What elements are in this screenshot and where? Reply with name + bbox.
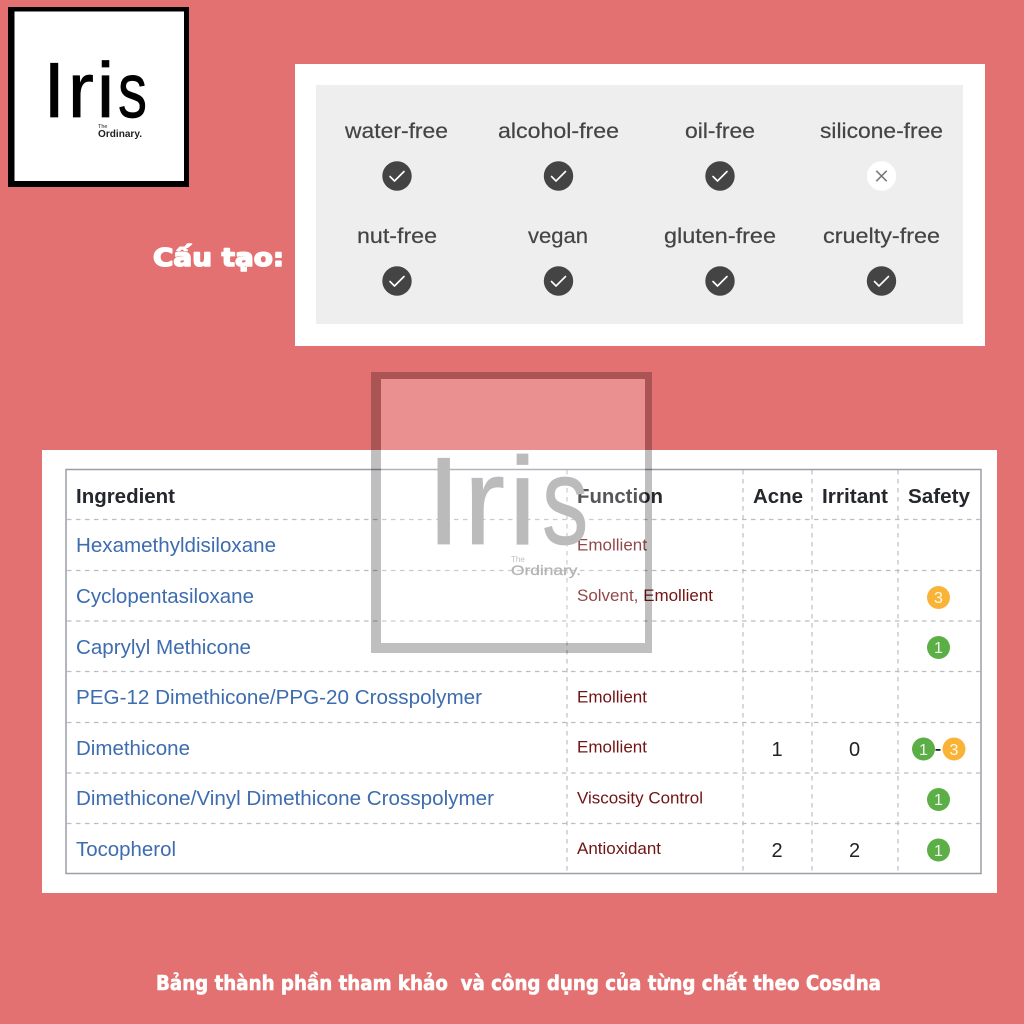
watermark: Iris The Ordinary (371, 372, 652, 653)
attribute labels: nut-free (357, 225, 437, 248)
ingredient functions: Antioxidant (577, 840, 661, 858)
table header (76, 486, 971, 508)
safety badges: 1 (934, 792, 943, 809)
heading: Cấu tạo: Cấu tạo: (153, 243, 284, 272)
acne and irritant scores: 1 (771, 739, 783, 761)
watermark: Iris The Ordinary: r (464, 433, 505, 571)
safety badges (912, 586, 966, 862)
ingredient functions (577, 536, 713, 858)
ingredient functions: Emollient (577, 738, 647, 756)
table header: Acne (753, 486, 803, 508)
ingredient names: Dimethicone (76, 737, 190, 760)
logo: Iris The Ordinary: The (98, 124, 107, 130)
ingredient functions: Emollient (577, 536, 647, 554)
table header: Irritant (822, 486, 888, 508)
table header: Function (577, 486, 663, 508)
check icons (382, 161, 896, 296)
table grid (66, 470, 981, 874)
attribute labels (344, 120, 943, 248)
ingredient names: Hexamethyldisiloxane (76, 534, 276, 557)
watermark: Iris The Ordinary: Ordinary. (511, 562, 581, 578)
ingredient functions: Emollient (577, 688, 647, 706)
attribute labels: cruelty-free (823, 225, 940, 248)
watermark: Iris The Ordinary: s (542, 433, 588, 571)
acne and irritant scores: 2 (849, 840, 860, 862)
safety badges: 1 (934, 843, 943, 860)
acne and irritant scores (771, 739, 860, 862)
caption: Bảng thành phần tham khảo và công dụng của từng chất theo Cosdna (156, 971, 881, 995)
panel: ingredient table (42, 450, 997, 893)
logo: Iris The Ordinary: r (68, 46, 94, 134)
attribute labels: alcohol-free (498, 120, 619, 143)
attribute labels: oil-free (685, 120, 755, 143)
acne and irritant scores: 0 (849, 739, 860, 761)
watermark: Iris The Ordinary: The (511, 555, 525, 564)
attribute labels: gluten-free (664, 225, 776, 248)
safety badges: 3 (950, 742, 959, 759)
ingredient names: Caprylyl Methicone (76, 636, 251, 659)
logo: Iris The Ordinary: I (43, 46, 65, 134)
ingredient names: Dimethicone/Vinyl Dimethicone Crosspolymer (76, 787, 494, 810)
attribute labels: silicone-free (820, 120, 943, 143)
logo: Iris The Ordinary: s (118, 46, 147, 134)
safety badges: 3 (934, 590, 943, 607)
watermark: Iris The Ordinary: I (426, 433, 461, 571)
logo: Iris The Ordinary: Ordinary. (98, 128, 142, 140)
ingredient names: Cyclopentasiloxane (76, 585, 254, 608)
attribute labels: water-free (344, 120, 448, 143)
ingredient names (76, 534, 494, 861)
logo: Iris The Ordinary: i (97, 46, 114, 134)
logo: Iris The Ordinary (8, 7, 189, 187)
safety badges: 1 (919, 742, 928, 759)
table header: Safety (908, 486, 971, 508)
cross icon (867, 161, 896, 191)
ingredient names: PEG-12 Dimethicone/PPG-20 Crosspolymer (76, 686, 482, 709)
acne and irritant scores: 2 (771, 840, 783, 862)
ingredient names: Tocopherol (76, 838, 176, 861)
ingredient functions: Viscosity Control (577, 790, 703, 808)
panel: product free-from attributes (295, 64, 985, 346)
safety badges: 1 (934, 640, 943, 657)
attribute labels: vegan (528, 225, 588, 248)
ingredient functions: Solvent, Emollient (577, 587, 713, 605)
table header: Ingredient (76, 486, 175, 508)
watermark: Iris The Ordinary: i (509, 433, 536, 571)
